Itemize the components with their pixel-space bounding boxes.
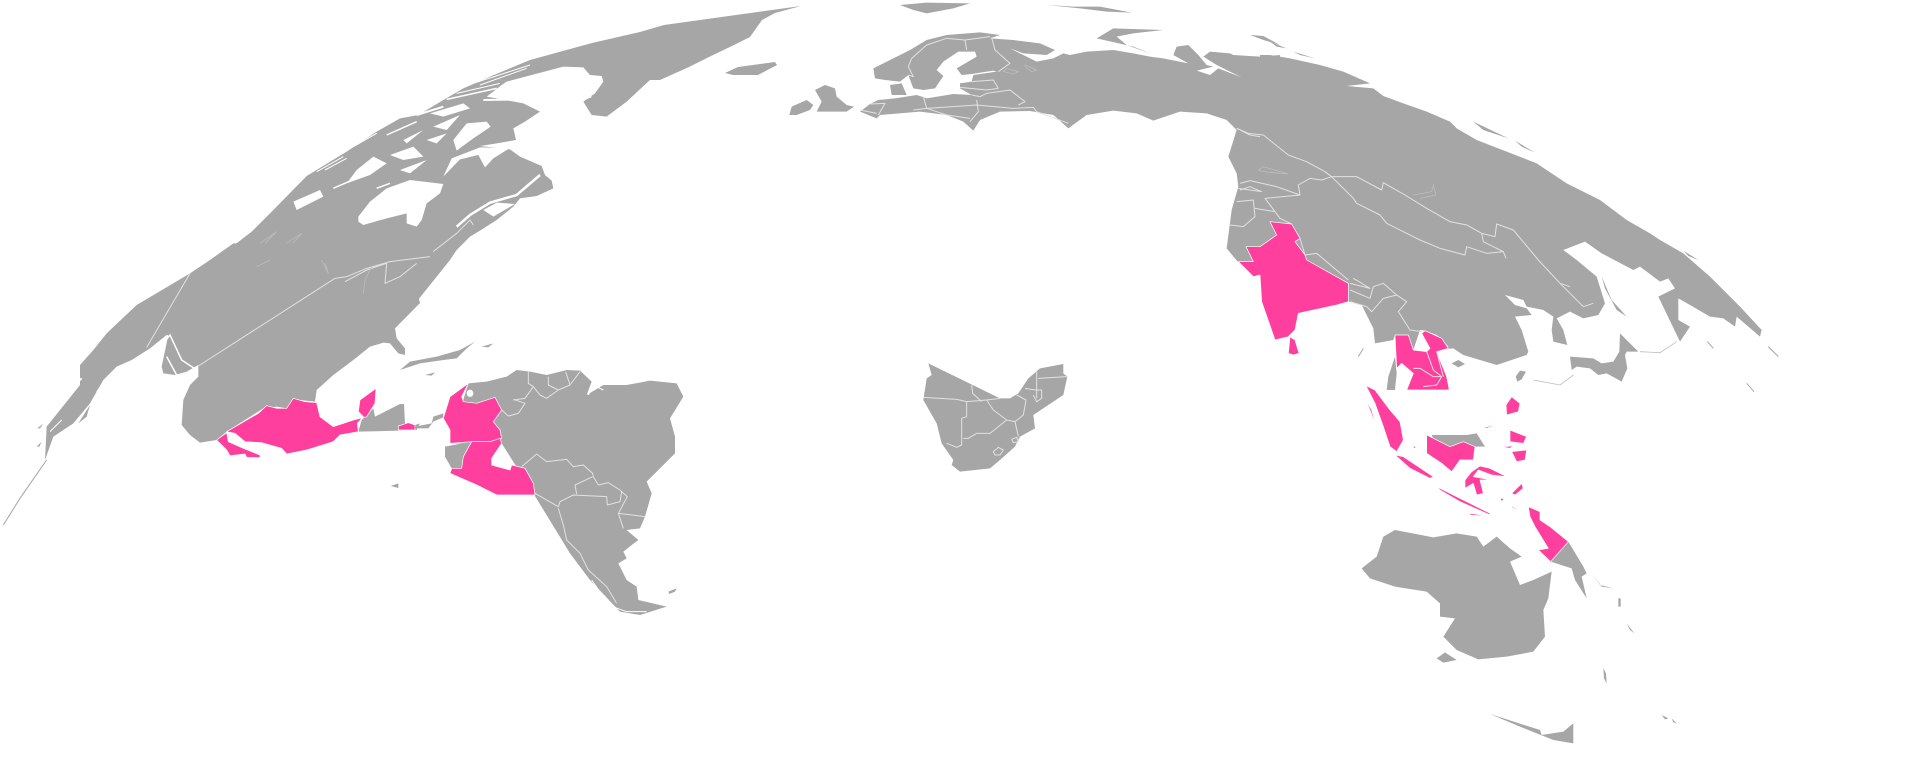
Okhotsk outlying islands: [1270, 42, 1698, 260]
continent: [923, 363, 1067, 472]
Amazon mouth: [588, 385, 603, 395]
landmass: Greenland and the Canadian Arctic: [230, 6, 801, 327]
highlighted: Sri Lanka: [1288, 337, 1299, 355]
Central America: [358, 404, 420, 432]
highlighted: Maluku: [1365, 398, 1523, 512]
Ecuador: [445, 442, 472, 468]
landmass: southern Africa: [923, 363, 1067, 472]
Tierra del Fuego channels: [592, 580, 647, 612]
highlighted: Sumatra: [1366, 386, 1403, 452]
Arctic islands: [1250, 35, 1280, 45]
New Zealand: [1490, 714, 1573, 743]
highlighted: Sulawesi: [1465, 466, 1507, 495]
borders and Great Lakes: [147, 257, 430, 366]
national borders: [923, 370, 1067, 455]
Hainan: [1452, 360, 1465, 367]
Malay Peninsula: [1387, 357, 1397, 390]
Australia: [1362, 530, 1552, 659]
highlighted: Philippines: [1482, 397, 1527, 462]
internal borders of Indochina: [1413, 352, 1443, 387]
Papua New Guinea: [1551, 542, 1587, 598]
Foxe Basin and Hudson Strait: [443, 147, 510, 177]
Great Britain: [815, 85, 854, 112]
interior lakes: [243, 220, 473, 257]
Sakhalin: [1602, 277, 1627, 317]
highlighted: Borneo south: [1427, 435, 1475, 472]
Tasmania: [1437, 652, 1457, 663]
highlighted: Peru: [450, 438, 535, 495]
landmass: India and mainland Southeast Asia: [1230, 128, 1593, 390]
landmass: Maritime Southeast Asia and Oceania: [1362, 386, 1677, 743]
Pacific islands: [1592, 573, 1677, 723]
mainland: [45, 243, 433, 460]
Taiwan: [1516, 371, 1526, 382]
continent: [450, 370, 683, 615]
Svalbard: [900, 3, 970, 13]
Japan: [1570, 333, 1638, 382]
highlighted: Baja California: [217, 433, 260, 458]
Alaska tail: [3, 460, 47, 525]
continent: [1260, 55, 1762, 365]
national borders: [1230, 128, 1593, 332]
Falkland Islands: [668, 588, 677, 594]
Franz Josef Land: [1047, 5, 1132, 13]
Iceland: [725, 62, 777, 75]
landmass: South America: [400, 342, 683, 615]
highlighted: Thailand, Laos, Cambodia and Vietnam: [1395, 331, 1449, 390]
highlighted: Costa Rica: [398, 423, 415, 430]
continent: [860, 32, 1280, 267]
highlighted: Colombia: [443, 383, 502, 443]
Denmark: [890, 83, 907, 95]
Greenland: [490, 6, 801, 117]
Novaya Zemlya: [1097, 28, 1163, 53]
landmass: Siberia and East Asia: [1260, 42, 1778, 392]
Maracaibo lake: [467, 390, 473, 397]
highlighted: western New Guinea: [1528, 507, 1568, 562]
Arctic channels: [293, 65, 602, 227]
highlighted: Mexico: [227, 388, 376, 454]
northern Baffin channels: [453, 122, 491, 151]
landmass: Europe and western Asia: [789, 3, 1280, 267]
Alaska slits and panhandle fjords: [50, 335, 197, 432]
Kuril and island specks: [1358, 342, 1778, 392]
Gulf of St Lawrence: [483, 203, 515, 217]
highlighted: Java and Lesser Sunda Islands: [1395, 455, 1492, 517]
national borders: [502, 372, 645, 603]
highlighted: India: [1238, 222, 1348, 340]
Caribbean islands: [400, 342, 493, 376]
Borneo north: [1432, 433, 1485, 447]
national borders: [860, 37, 1270, 138]
Hudson Bay: [358, 180, 443, 227]
Ireland: [789, 100, 813, 115]
Arctic archipelago and northern Canada: [230, 77, 553, 327]
Alaska islands: [37, 405, 90, 447]
Panama: [415, 413, 443, 428]
Galapagos specks: [391, 483, 398, 488]
landmass: North America south of the Arctic: [3, 243, 433, 525]
